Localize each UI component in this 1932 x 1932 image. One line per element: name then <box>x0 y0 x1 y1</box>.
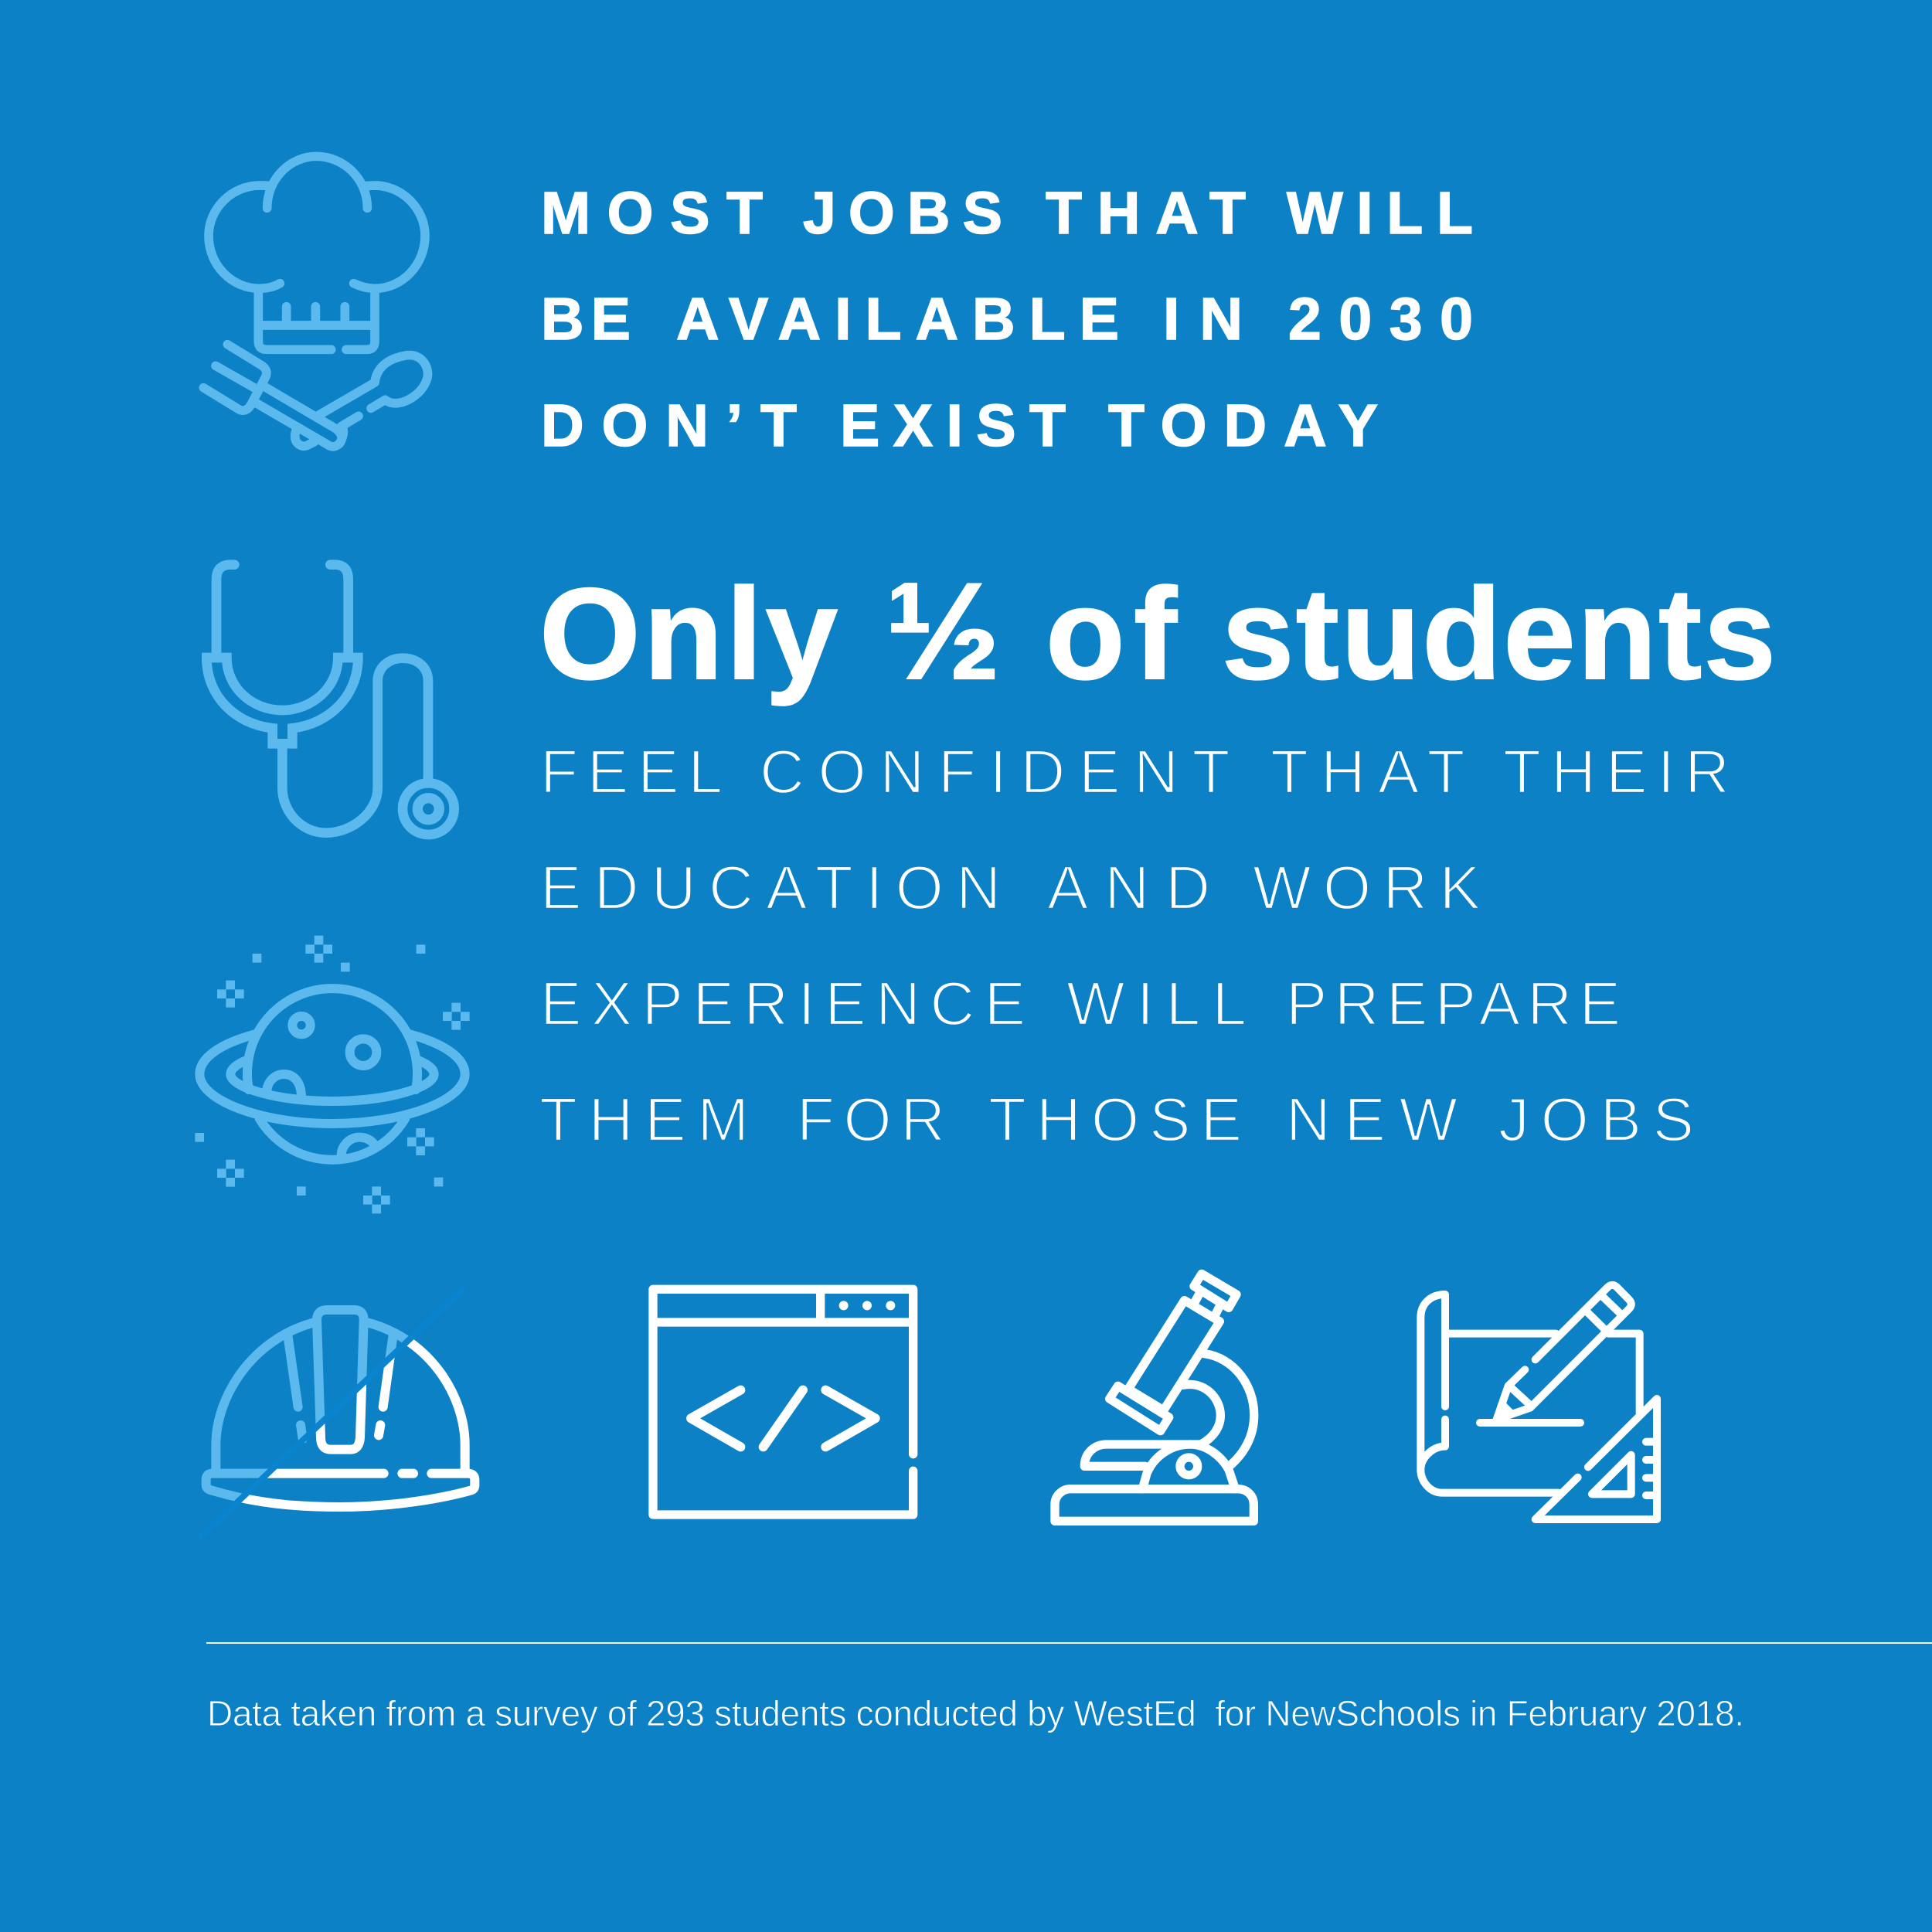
text block: feel confident: NEW <box>1286 1085 1458 1154</box>
text block: feel confident: EXPERIENCE <box>540 969 1026 1038</box>
text block: feel confident: FEEL <box>540 737 720 806</box>
heading: most jobs: MOST <box>541 180 763 247</box>
icon: chef hat with fork and spoon <box>203 156 428 447</box>
text block: feel confident: THAT <box>1270 737 1464 806</box>
callout: only half of students: students <box>1222 561 1776 706</box>
callout: only half of students: Only <box>539 561 838 706</box>
heading: most jobs: JOBS <box>803 180 1002 247</box>
footnote: Data taken from a survey of 293 students conducted by WestEd for NewSchools in February 2018. <box>207 1693 1744 1733</box>
text block: feel confident: WILL <box>1066 969 1244 1038</box>
infographic canvas <box>195 151 1932 1733</box>
text block: feel confident: CONFIDENT <box>760 737 1230 806</box>
divider rule <box>206 1642 1932 1644</box>
icon: microscope <box>1055 1274 1254 1521</box>
text block: feel confident: FOR <box>797 1085 945 1154</box>
icon: hard hat crossed by diagonal <box>201 1288 474 1536</box>
text block: feel confident: THOSE <box>988 1085 1242 1154</box>
icon: stethoscope <box>206 565 454 835</box>
text block: feel confident: JOBS <box>1498 1085 1694 1154</box>
heading: most jobs <box>541 180 1473 459</box>
heading: most jobs: BE <box>541 286 631 352</box>
text block: feel confident: PREPARE <box>1286 969 1621 1038</box>
heading: most jobs: THAT <box>1046 180 1246 247</box>
text block: feel confident: THEM <box>539 1085 749 1154</box>
icon: ringed planet with stars <box>195 936 470 1213</box>
heading: most jobs: EXIST <box>840 393 1066 459</box>
heading: most jobs: 2030 <box>1288 286 1473 352</box>
heading: most jobs: DON’T <box>541 393 797 459</box>
text block: feel confident: AND <box>1047 853 1210 922</box>
text block: feel confident <box>539 737 1730 1154</box>
callout: only half of students <box>539 554 1776 708</box>
icon: blueprint with pencil and set square <box>1420 1285 1657 1519</box>
heading: most jobs: WILL <box>1287 180 1473 247</box>
callout: only half of students: ½ <box>886 554 1000 708</box>
heading: most jobs: AVAILABLE <box>676 286 1119 352</box>
text block: feel confident: THEIR <box>1503 737 1730 806</box>
text block: feel confident: WORK <box>1253 853 1481 922</box>
text block: feel confident: EDUCATION <box>540 853 1001 922</box>
heading: most jobs: IN <box>1163 286 1243 352</box>
heading: most jobs: TODAY <box>1108 393 1378 459</box>
icon: browser window with code <box>653 1289 913 1515</box>
callout: only half of students: of <box>1046 561 1178 706</box>
